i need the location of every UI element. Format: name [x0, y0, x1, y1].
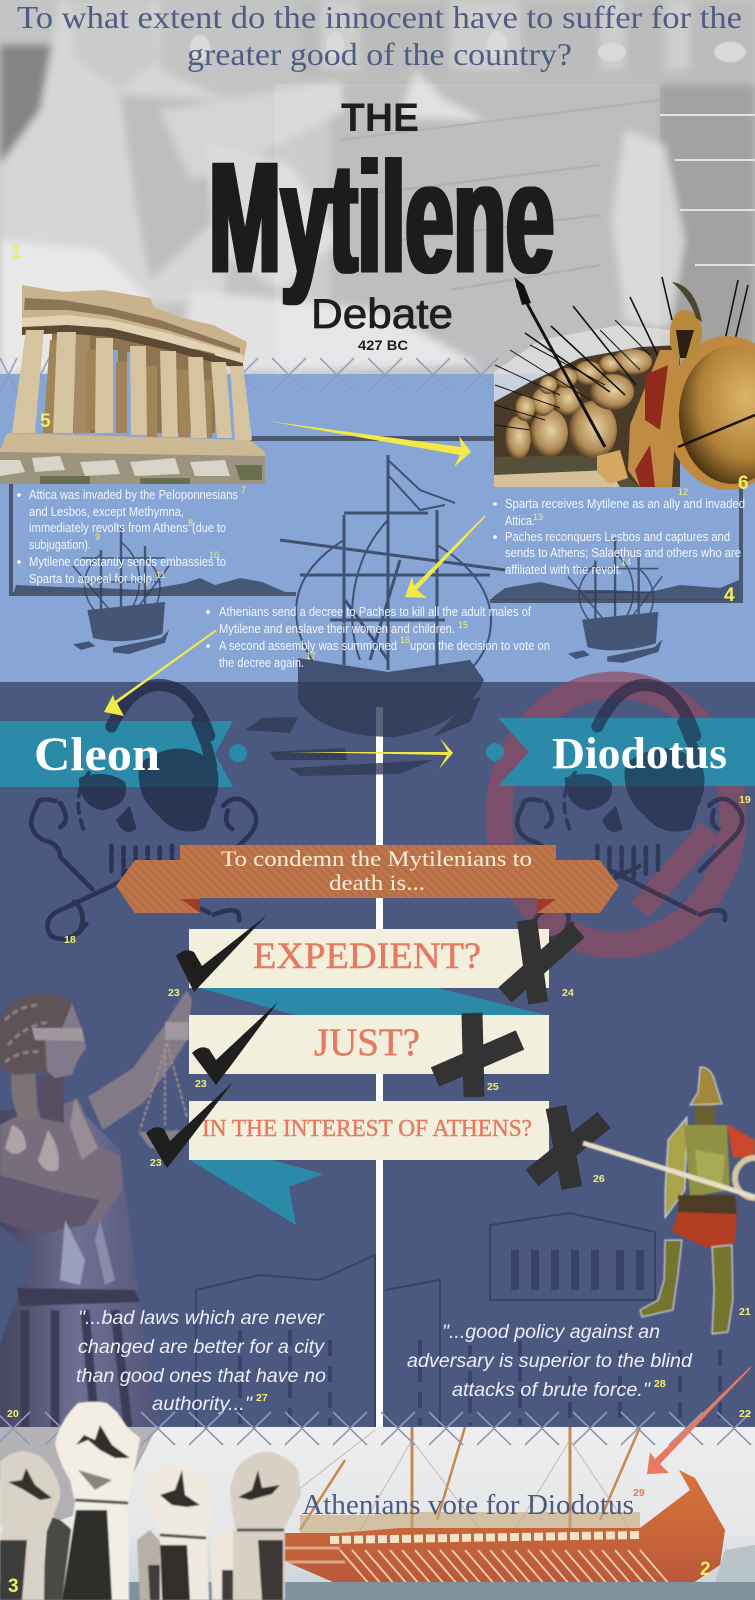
text block: decree events: 15: [458, 620, 468, 630]
box: expedient: EXPEDIENT?: [253, 936, 481, 977]
text block: left events: [17, 485, 246, 586]
quote: Cleon: [76, 1307, 326, 1415]
text block: decree events: [206, 605, 550, 670]
box: expedient: [189, 929, 549, 988]
quote: Diodotus: "...good policy against an: [442, 1321, 660, 1343]
text block: left events: subjugation).: [29, 538, 91, 552]
image: Parthenon: 5: [40, 411, 51, 432]
box: interest of Athens: [189, 1101, 549, 1160]
panel: top engraving background: [0, 0, 755, 380]
icon: cross 2: [435, 1013, 520, 1097]
quote: Diodotus: adversary is superior to the blind: [407, 1350, 693, 1372]
image: Spartan phalanx: [494, 277, 755, 490]
icon: check 2: [192, 1002, 278, 1085]
reference numbers: 2: [700, 1559, 711, 1580]
text block: right events: [493, 487, 745, 577]
text block: right events: 13: [533, 512, 543, 522]
banner: question: To condemn the Mytilenians to: [221, 846, 532, 871]
text block: right events: Attica.: [505, 514, 535, 528]
title: The Mytilene Debate: Debate: [311, 290, 453, 337]
arrow: Sparta to decree: [405, 515, 486, 598]
ribbon connector: upper: [200, 988, 546, 1015]
statue: Lady Justice: [0, 990, 192, 1427]
banner: question: [116, 845, 619, 913]
label: Cleon: Cleon: [34, 728, 160, 781]
icon: cross 1: [505, 920, 578, 1003]
reference numbers: 19: [739, 794, 751, 806]
title: guiding question: To what extent do the innocent have to suffer for the: [17, 0, 742, 35]
panel: bottom trireme: [0, 1427, 755, 1600]
text block: left events: 10: [209, 550, 219, 560]
panel: bottom trireme: Athenians vote for Diodotus: [302, 1489, 634, 1521]
image: hoplite soldier: [583, 1067, 755, 1334]
title: guiding question: [17, 0, 742, 72]
text block: decree events: the decree again.: [219, 656, 304, 670]
title: The Mytilene Debate: 427 BC: [358, 337, 408, 353]
box: just: [189, 1015, 549, 1074]
ship: right small: [568, 537, 662, 663]
icon: raised fists: [0, 1402, 301, 1600]
reference numbers: 1: [11, 242, 22, 263]
reference numbers: 3: [8, 1576, 19, 1597]
skull: left: [31, 685, 256, 939]
arrow: decree to Cleon: [104, 630, 217, 716]
ship: left small: [73, 526, 169, 654]
quote: Cleon: changed are better for a city: [78, 1336, 325, 1358]
label: Diodotus: Diodotus: [552, 729, 727, 778]
text block: right events: affiliated with the revolt.: [505, 563, 622, 577]
quote: Diodotus: [407, 1321, 693, 1401]
text block: left events: 7: [241, 485, 246, 495]
reference numbers: 23: [150, 1157, 162, 1169]
reference numbers: 24: [562, 987, 574, 999]
quote: Cleon: 27: [256, 1392, 268, 1404]
quote: Diodotus: 28: [654, 1378, 666, 1390]
ghost skyline: [196, 1213, 720, 1427]
title: The Mytilene Debate: THE: [341, 96, 419, 140]
reference numbers: 29: [633, 1487, 645, 1499]
quote: Cleon: than good ones that have no: [76, 1365, 326, 1387]
text block: decree events: Mytilene and enslave their women and children.: [219, 622, 455, 636]
text block: decree events: upon the decision to vote on: [410, 639, 550, 653]
reference numbers: 18: [64, 934, 76, 946]
ribbon tail: lower: [190, 1160, 323, 1225]
reference numbers: 22: [739, 1408, 751, 1420]
ship: large central: [245, 455, 505, 776]
fist: left: [0, 1451, 60, 1600]
text block: decree events: Athenians send a decree to Paches to kill all the adult males of: [219, 605, 531, 619]
text block: right events: 12: [678, 487, 688, 497]
row of crosses: lower seam: [0, 1412, 751, 1445]
text block: left events: Sparta to appeal for help.: [29, 572, 155, 586]
icon: check 3: [146, 1082, 233, 1168]
text block: left events: 9: [95, 532, 100, 542]
text block: left events: Mytilene constantly sends embassies to: [29, 555, 226, 569]
box: just: JUST?: [314, 1021, 420, 1064]
reference numbers: 21: [739, 1306, 751, 1318]
text block: decree events: A second assembly was summoned: [219, 639, 397, 653]
icon: check 1: [176, 915, 267, 992]
arrow: Attica to Sparta: [268, 421, 471, 467]
row of crosses: upper seam: [0, 358, 498, 392]
icon: cross 3: [532, 1107, 604, 1188]
ribbon: Cleon: [0, 721, 247, 787]
title: guiding question: greater good of the country?: [187, 36, 572, 72]
image: Parthenon: [0, 285, 265, 484]
fist: large: [55, 1402, 140, 1600]
reference numbers: 23: [195, 1078, 207, 1090]
fist: right: [230, 1452, 301, 1600]
fist: third: [142, 1464, 213, 1600]
text block: decree events: 17: [306, 651, 316, 661]
reference numbers: 23: [168, 987, 180, 999]
banner: question: death is...: [329, 870, 425, 895]
panel: navy background: [0, 682, 755, 1427]
text block: left events: Attica was invaded by the Peloponnesians: [29, 488, 238, 502]
quote: Cleon: authority...": [152, 1393, 253, 1415]
box: interest of Athens: IN THE INTEREST OF ATHENS?: [202, 1116, 532, 1142]
text block: right events: 14: [621, 557, 631, 567]
reference numbers: 25: [487, 1081, 499, 1093]
reference numbers: 26: [593, 1173, 605, 1185]
shoreline silhouettes: [14, 578, 739, 600]
ribbon: Diodotus: [486, 718, 755, 786]
ring: red no-symbol behind Diodotus: [499, 685, 733, 945]
quote: Cleon: "...bad laws which are never: [78, 1307, 326, 1329]
text block: decree events: 16: [400, 635, 410, 645]
text block: left events: immediately revolts from Athens: [29, 521, 188, 535]
text block: left events: and Lesbos, except Methymna,: [29, 505, 184, 519]
central divider line: [376, 707, 383, 1427]
skull: right: [517, 685, 742, 939]
title: The Mytilene Debate: [209, 96, 554, 353]
quote: Diodotus: attacks of brute force.": [452, 1379, 651, 1401]
reference numbers: 20: [7, 1408, 19, 1420]
text block: left events: (due to: [192, 521, 226, 535]
panel: blue background: [0, 374, 755, 682]
frame lines around the blue text: [9, 436, 743, 603]
arrow: vote: [647, 1367, 751, 1474]
reference numbers: 6: [738, 473, 749, 494]
text block: left events: 11: [156, 570, 165, 580]
reference numbers: 4: [724, 585, 735, 606]
text block: right events: Paches reconquers Lesbos and captures and: [505, 530, 730, 544]
text block: left events: 8: [188, 518, 193, 528]
arrow: Cleon to Diodotus: [289, 738, 453, 769]
